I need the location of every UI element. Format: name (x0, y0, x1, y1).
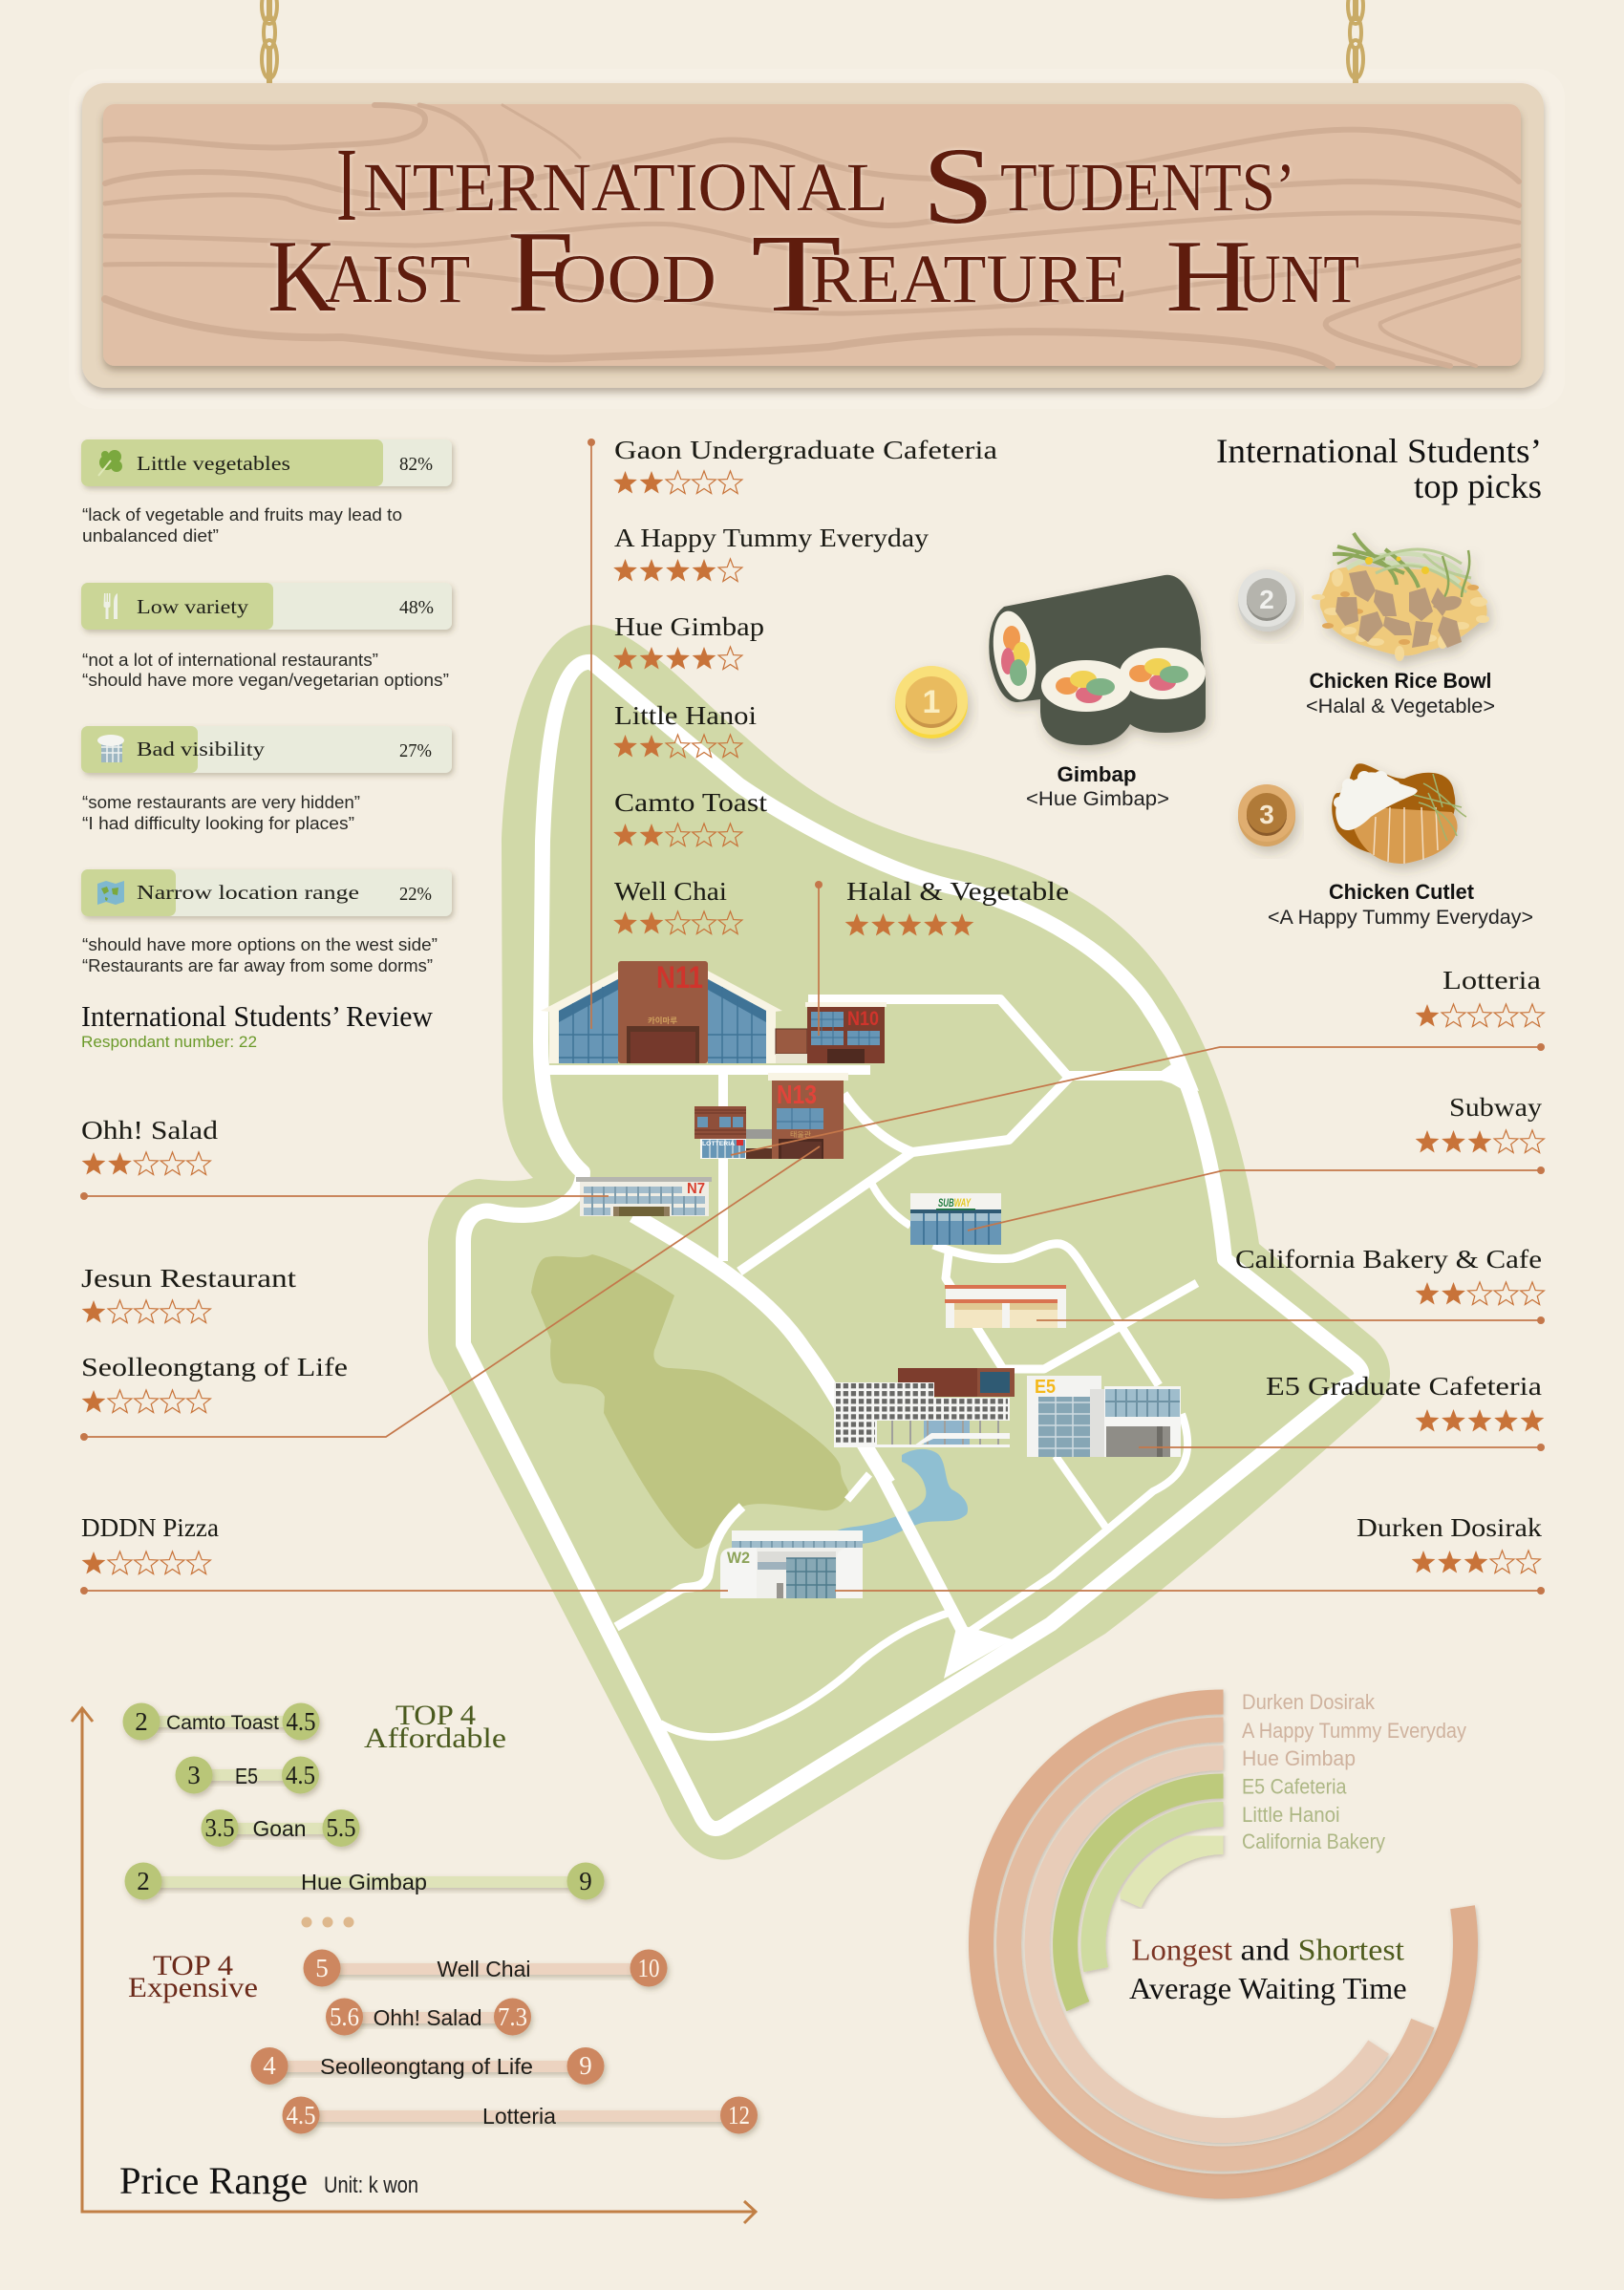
chart title: and (1240, 1932, 1290, 1966)
rating: Gaon: Gaon Undergraduate Cafeteria (614, 436, 997, 464)
rating: E5 Graduate Cafeteria (1266, 1372, 1544, 1432)
connector: E5 (1139, 1444, 1545, 1451)
title line 2: OOD (552, 241, 716, 317)
title line 2: H (1165, 220, 1251, 333)
ring: Hue Gimbap (1037, 1758, 1378, 2130)
review bar: Bad visibility (81, 726, 452, 773)
ellipsis dots (302, 1916, 353, 1928)
label: Gimbap (1026, 762, 1169, 810)
connector: DDDN and Durken (80, 1587, 1545, 1594)
icon: silver coin 2 (1238, 569, 1295, 631)
ring: A Happy Tummy Everyday (1009, 1729, 1422, 2159)
heading: top 4 affordable: TOP 4 (395, 1700, 476, 1731)
building: E5: E5 (1035, 1377, 1056, 1398)
rating: Durken Dosirak (1357, 1513, 1543, 1573)
chart legend: E5 Cafeteria (1242, 1775, 1347, 1799)
heading: price range: Unit: k won (324, 2172, 418, 2198)
chart legend: California Bakery (1242, 1830, 1385, 1853)
building: west complex (834, 1368, 1015, 1447)
rating: Little Hanoi (613, 701, 757, 758)
rating: Seolleongtang: Seolleongtang of Life (81, 1353, 348, 1381)
quote: vegetables: “lack of vegetable and fruits may lead to (82, 505, 402, 524)
chart legend: Durken Dosirak (1242, 1690, 1376, 1714)
row: Seolleongtang (250, 2047, 604, 2085)
review bar: Narrow location range (81, 869, 452, 916)
icon: gold coin 1 (895, 666, 968, 738)
rating: Lotteria (1416, 966, 1544, 1027)
rating: Lotteria: Lotteria (1442, 966, 1541, 995)
rating: Jesun Restaurant (81, 1264, 297, 1323)
row: Well Chai: 10 (638, 1954, 659, 1982)
title sign board (82, 83, 1544, 388)
map roads (463, 662, 1361, 1829)
quote: vegetables: unbalanced diet” (82, 526, 219, 546)
building: N11 (541, 960, 782, 1063)
rating: Subway: Subway (1449, 1093, 1543, 1122)
quote: location: “Restaurants are far away from some dorms” (82, 956, 433, 975)
rating: DDDN Pizza (81, 1513, 219, 1574)
rating: Durken Dosirak: Durken Dosirak (1357, 1513, 1543, 1542)
title line 1: NTERNATIONAL (363, 149, 886, 225)
building: N13 (768, 1073, 848, 1159)
building: California Bakery (945, 1285, 1066, 1328)
review bar: Narrow location range: 22% (399, 884, 432, 905)
row: Lotteria (283, 2096, 758, 2134)
rating: A Happy Tummy: A Happy Tummy Everyday (614, 524, 930, 552)
icon: chicken cutlet (1332, 763, 1466, 864)
heading: top 4 expensive: Expensive (128, 1972, 258, 2003)
icon: lettuce (98, 450, 122, 476)
connector: Lotteria (731, 1043, 1545, 1155)
review bar: Low variety: 48% (399, 597, 434, 618)
chart legend (1242, 1690, 1466, 1853)
row: E5 (176, 1756, 319, 1794)
heading: top 4 affordable: Affordable (364, 1723, 506, 1754)
heading: top picks (1216, 432, 1542, 505)
heading: top picks: top picks (1414, 467, 1542, 505)
row: E5: 4.5 (286, 1761, 315, 1789)
heading: top picks: International Students’ (1216, 432, 1542, 470)
connector: California Bakery (1036, 1316, 1545, 1324)
rating: E5 Graduate Cafeteria: E5 Graduate Cafeteria (1266, 1372, 1542, 1401)
rating: Subway (1416, 1093, 1544, 1153)
building: N11: 카이마루 (648, 1016, 678, 1025)
row: Lotteria: 12 (728, 2101, 750, 2129)
building: Subway (910, 1193, 1001, 1245)
title line 2: UNT (1238, 241, 1359, 317)
map land (428, 625, 1390, 1860)
waiting time radial chart (981, 1690, 1466, 2187)
chart title: Longest (1131, 1932, 1232, 1966)
row: Camto Toast: 4.5 (287, 1707, 315, 1736)
review bar: Bad visibility: Bad visibility (137, 738, 266, 760)
row: Goan (201, 1809, 359, 1847)
title line 1: TUDENTS’ (1000, 149, 1295, 225)
review bar: Low variety (81, 583, 452, 630)
row: Seolleongtang: 9 (579, 2051, 592, 2080)
row: E5: 3 (187, 1761, 201, 1789)
row: Hue Gimbap: 9 (579, 1867, 592, 1895)
row: Camto Toast: Camto Toast (166, 1712, 279, 1734)
ring: Durken Dosirak (981, 1702, 1465, 2187)
quote: vegetables (82, 505, 402, 546)
building: N7 (576, 1177, 712, 1216)
map river (831, 1449, 968, 1544)
review bar: Little vegetables: 82% (399, 454, 433, 475)
rating: Gaon (613, 436, 997, 494)
icon: foggy building (97, 735, 124, 762)
row: Ohh Salad: 5.6 (330, 2002, 359, 2031)
row: Well Chai (304, 1949, 667, 1987)
row: Goan: 3.5 (204, 1813, 235, 1842)
label: Chicken Cutlet: Chicken Cutlet (1329, 880, 1475, 904)
rating: California Bakery: California Bakery & Cafe (1235, 1245, 1542, 1273)
icon: fork and knife (103, 593, 118, 619)
connector: Gaon and N11 (588, 439, 595, 1029)
quote: location (82, 935, 438, 975)
review bar: Little vegetables: Little vegetables (137, 452, 290, 475)
title line 2: T (751, 213, 842, 335)
rating: Ohh Salad (81, 1116, 219, 1175)
rating: Hue Gimbap (613, 612, 764, 670)
campus map (428, 625, 1390, 1860)
ring: E5 Cafeteria (1065, 1787, 1223, 2006)
heading: top 4 affordable (364, 1700, 506, 1754)
rating: California Bakery (1235, 1245, 1544, 1305)
row: Lotteria: Lotteria (482, 2104, 556, 2129)
quote: visibility: “I had difficulty looking for places” (82, 814, 354, 833)
row: Seolleongtang: 4 (263, 2051, 276, 2080)
rating: Ohh Salad: Ohh! Salad (81, 1116, 219, 1145)
building: N13: 태울관 (790, 1129, 811, 1139)
row: Camto Toast: 2 (135, 1707, 148, 1736)
icon: bronze coin 3: 3 (1259, 800, 1274, 829)
wood grain (105, 105, 1519, 366)
rating: Well Chai: Well Chai (614, 877, 727, 906)
chart title (1129, 1932, 1407, 2005)
quote: variety: “not a lot of international restaurants” (82, 651, 378, 670)
label: Chicken Cutlet: <A Happy Tummy Everyday> (1268, 907, 1533, 929)
review bar: Narrow location range: Narrow location range (137, 881, 359, 904)
building: N10: N10 (847, 1008, 879, 1030)
chart axes (72, 1708, 756, 2223)
building: Lotteria (694, 1106, 772, 1159)
icon: bronze coin 3 (1238, 784, 1295, 846)
title line 2: REATURE (810, 241, 1127, 317)
title line 2: K (267, 220, 336, 333)
map forest (531, 1254, 848, 1549)
heading: review: International Students’ Review (81, 999, 434, 1033)
rating: Hue Gimbap: Hue Gimbap (614, 612, 764, 641)
building: N7: N7 (687, 1181, 705, 1197)
row: Lotteria: 4.5 (287, 2101, 315, 2129)
building: E5 (1027, 1376, 1181, 1457)
label: Chicken Cutlet (1268, 880, 1533, 929)
row: Goan: 5.5 (327, 1813, 355, 1842)
row: Ohh Salad (326, 1999, 531, 2035)
rating: Halal and Vegetable: Halal & Vegetable (846, 877, 1069, 906)
row: Camto Toast (122, 1702, 319, 1741)
quote: visibility (82, 793, 360, 833)
icon: gimbap illustration (987, 575, 1206, 745)
quote: variety: “should have more vegan/vegetarian options” (82, 671, 449, 690)
rating: A Happy Tummy (613, 524, 930, 582)
building: W2 (720, 1530, 863, 1598)
label: Chicken Rice Bowl (1306, 669, 1495, 717)
price range chart (72, 1700, 758, 2223)
icon: silver coin 2: 2 (1259, 585, 1274, 614)
rating: Camto Toast (613, 788, 768, 846)
heading: price range: Price Range (119, 2159, 308, 2202)
title line 1: I (336, 126, 357, 243)
board outer glow (69, 69, 1565, 409)
quote: visibility: “some restaurants are very hidden” (82, 793, 360, 812)
rating: Well Chai (613, 877, 742, 934)
chart legend: Little Hanoi (1242, 1803, 1340, 1827)
row: Ohh Salad: 7.3 (498, 2002, 527, 2031)
connector: Subway (968, 1166, 1545, 1231)
review bar: Low variety: Low variety (137, 595, 249, 618)
label: Chicken Rice Bowl: Chicken Rice Bowl (1309, 669, 1492, 693)
quote: location: “should have more options on the west side” (82, 935, 438, 954)
building: Lotteria: LOTTERIA (702, 1141, 735, 1147)
row: Hue Gimbap: 2 (137, 1867, 150, 1895)
rating: Seolleongtang (81, 1353, 348, 1413)
icon: folded map (97, 881, 124, 905)
icon: gold coin 1: 1 (923, 684, 940, 720)
row: Well Chai: 5 (315, 1954, 329, 1982)
building: N11: N11 (656, 960, 703, 995)
building: W2: W2 (727, 1549, 750, 1567)
icon: hanging chains (262, 0, 1363, 83)
title line 2: F (507, 207, 574, 336)
row: Hue Gimbap (124, 1863, 604, 1899)
rating: Jesun Restaurant: Jesun Restaurant (81, 1264, 297, 1293)
ring: California Bakery (1130, 1842, 1223, 1903)
heading: review (81, 999, 434, 1051)
row: Ohh Salad: Ohh! Salad (374, 2005, 482, 2030)
label: Chicken Rice Bowl: <Halal & Vegetable> (1306, 696, 1495, 717)
chart title: Shortest (1298, 1932, 1404, 1966)
row: Well Chai: Well Chai (438, 1957, 531, 1981)
row: Goan: Goan (252, 1816, 306, 1841)
chart title: Average Waiting Time (1129, 1971, 1407, 2005)
row: Hue Gimbap: Hue Gimbap (301, 1870, 427, 1894)
label: Gimbap: Gimbap (1057, 762, 1137, 786)
review bar: Bad visibility: 27% (399, 740, 432, 761)
connector: Halal and N10 (815, 881, 823, 1036)
connector: Ohh Salad (80, 1192, 609, 1200)
rating: Camto Toast: Camto Toast (614, 788, 768, 817)
rating: Little Hanoi: Little Hanoi (614, 701, 757, 730)
heading: top 4 expensive (128, 1950, 258, 2003)
review bar: Little vegetables (81, 439, 452, 486)
quote: variety (82, 651, 449, 690)
rating: Halal and Vegetable (845, 877, 1069, 936)
building: N13: N13 (777, 1080, 817, 1109)
chart legend: A Happy Tummy Everyday (1242, 1719, 1466, 1743)
title line 1: S (922, 125, 994, 246)
heading: top 4 expensive: TOP 4 (153, 1950, 233, 1981)
connector: Seolleongtang (80, 1146, 820, 1441)
building: N10 (776, 1002, 887, 1063)
chart legend: Hue Gimbap (1242, 1746, 1356, 1770)
title line 2: AIST (325, 241, 469, 317)
heading: review: Respondant number: 22 (81, 1033, 257, 1051)
icon: chicken rice bowl (1312, 533, 1489, 661)
heading: price range (119, 2159, 418, 2202)
row: Seolleongtang: Seolleongtang of Life (320, 2054, 533, 2079)
row: E5: E5 (235, 1764, 258, 1788)
label: Gimbap: <Hue Gimbap> (1026, 788, 1169, 810)
building: Subway: SUBWAY (938, 1196, 972, 1209)
rating: DDDN Pizza: DDDN Pizza (81, 1513, 219, 1542)
ring: Little Hanoi (1094, 1814, 1223, 1970)
